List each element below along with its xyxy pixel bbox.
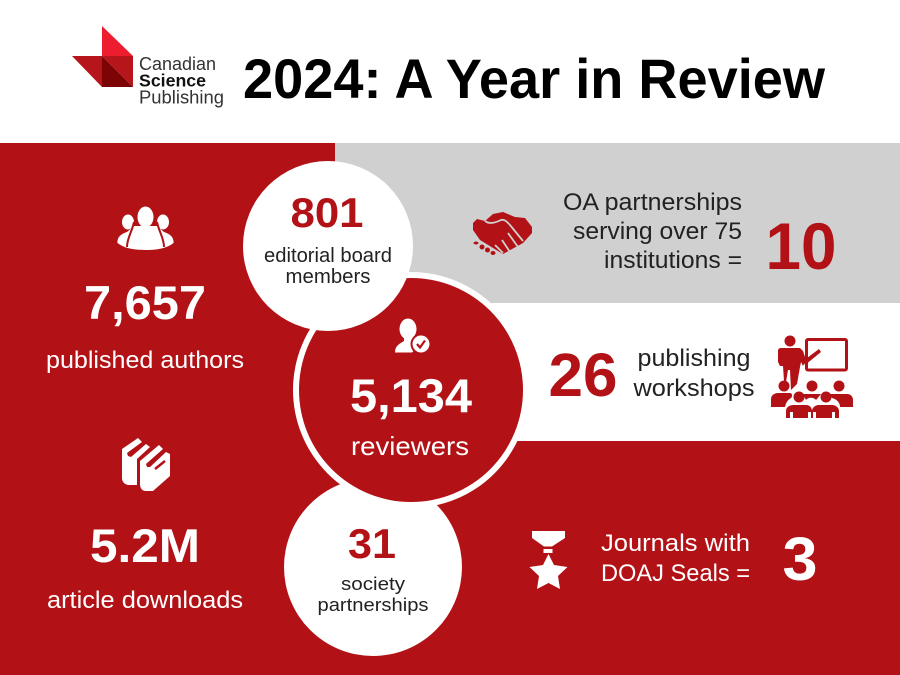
circle: editorial board members	[243, 161, 413, 331]
stat: DOAJ seals: DOAJ Seals =	[601, 560, 750, 587]
label: editorial board	[264, 245, 392, 267]
circle: society partnerships: partnerships	[318, 594, 428, 615]
stat: DOAJ seals	[530, 525, 818, 593]
stat: OA partnerships: institutions =	[604, 247, 742, 274]
logo: Canadian Science Publishing	[72, 26, 224, 108]
logo: Canadian Science Publishing: Publishing	[139, 88, 224, 108]
number: 5.2M	[90, 519, 200, 572]
panel: red background	[0, 143, 900, 675]
stat: publishing workshops: workshops	[632, 375, 754, 402]
text: OA partnerships	[563, 189, 742, 216]
circle: editorial board members: members	[286, 266, 370, 288]
number: 31	[348, 520, 396, 567]
number: 26	[548, 341, 618, 409]
text: Journals with	[601, 530, 750, 557]
panel: grey OA partnerships band	[335, 143, 900, 303]
number: 3	[782, 525, 818, 593]
panel: white workshops band	[450, 303, 900, 441]
icon: medal star	[530, 531, 568, 589]
icon: handshake	[473, 212, 532, 255]
label: reviewers	[351, 431, 469, 461]
title: 2024: A Year in Review	[243, 47, 825, 110]
icon: group of people	[117, 206, 174, 250]
number: 5,134	[350, 369, 472, 422]
logo: Canadian Science Publishing: Canadian	[139, 54, 216, 74]
stat: article downloads	[47, 438, 243, 614]
icon: reviewer with check	[395, 318, 432, 354]
label: published authors	[46, 347, 244, 374]
text: publishing	[638, 345, 750, 372]
number: 801	[290, 189, 364, 236]
logo: Canadian Science Publishing: Science	[139, 70, 206, 90]
circle: society partnerships	[284, 478, 462, 656]
label: article downloads	[47, 587, 243, 614]
icon: presenter and audience	[771, 336, 853, 418]
stat: publishing workshops	[548, 336, 853, 418]
label: society	[341, 573, 406, 594]
number: 10	[766, 209, 836, 283]
icon: books	[122, 438, 170, 491]
stat: OA partnerships	[473, 189, 836, 283]
circle: reviewers	[293, 272, 529, 508]
stat: OA partnerships: serving over 75	[573, 218, 742, 245]
stat: published authors	[46, 206, 244, 374]
number: 7,657	[84, 276, 206, 329]
